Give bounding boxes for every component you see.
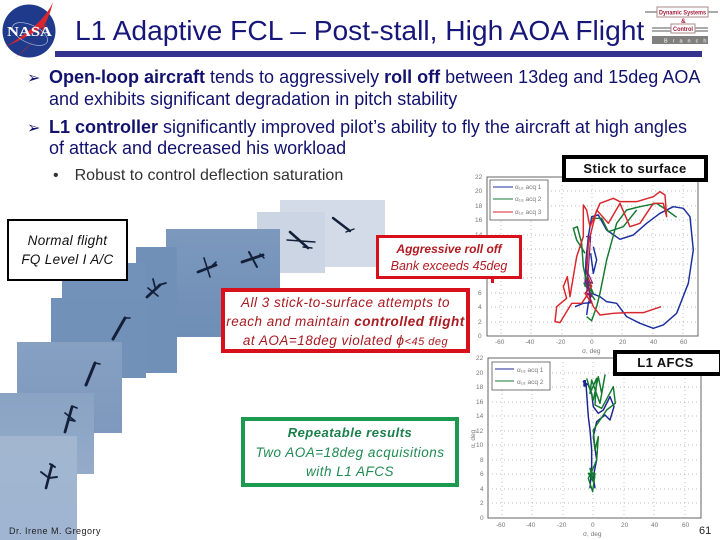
footer: author: Dr. Irene M. Gregory [9,526,101,536]
axis labels: 40 [651,522,659,529]
axis labels: 14 [475,232,483,239]
legend: α₁₈ acq 3 [515,209,542,216]
axis labels [470,355,690,538]
axis labels: 60 [682,522,690,529]
axis labels [475,174,688,355]
title rule [55,51,702,57]
callout: stick to surface [562,155,708,182]
axis labels: 20 [476,370,484,377]
bullet 2: of attack and decreased his workload [49,138,346,158]
callout: L1 AFCS: L1 AFCS [637,355,694,370]
callout tick [491,279,494,283]
Dynamic Systems & Control Branch logo: Branch [664,38,711,44]
axis labels: 12 [476,428,484,435]
bullet 1 [27,67,700,109]
axis labels: -40 [526,522,536,529]
legend: α₁₈ acq 2 [515,196,542,203]
axis labels: 18 [476,384,484,391]
bullet 1: and exhibits significant degradation in pitch stability [49,89,457,109]
axis labels: 10 [476,442,484,449]
axis labels: 2 [480,500,484,507]
axis labels: -20 [557,522,567,529]
Dynamic Systems & Control Branch logo: Dynamic Systems [659,10,706,16]
axis labels: 20 [621,522,629,529]
axis labels: 6 [480,471,484,478]
axis labels: 18 [475,203,483,210]
callout: all 3 attempts [221,288,470,353]
axis labels: 20 [475,188,483,195]
axis labels: 0 [478,333,482,340]
axis labels: σ, deg [582,348,601,355]
axis labels: -60 [495,339,505,346]
callout: all 3 attempts: All 3 stick-to-surface attempts to [241,295,450,310]
callout: aggressive roll off: Bank exceeds 45deg [391,259,507,273]
callout: all 3 attempts: at AOA=18deg violated ϕ<45 deg [243,332,448,348]
callout: repeatable results: Two AOA=18deg acquisitions [256,444,444,460]
axis labels: 0 [590,339,594,346]
axis labels: 6 [478,290,482,297]
axis labels: 16 [476,399,484,406]
legend [492,362,550,390]
callout: normal flight: Normal flight [28,233,107,248]
NASA logo: NASA [7,25,53,40]
axis labels: 20 [619,339,627,346]
callout: repeatable results: with L1 AFCS [306,464,394,479]
axis labels: -40 [525,339,535,346]
bullet 2: L1 controller significantly improved pilot’s ability to fly the aircraft at high angles [49,117,687,137]
axis labels: 40 [650,339,658,346]
page number: 61 [699,525,711,537]
bullet 2: ➢ [27,118,40,137]
callout: aggressive roll off [376,235,522,279]
title: L1 Adaptive FCL – Post-stall, High AOA Flight [75,14,644,46]
axis labels: 22 [476,355,484,362]
axis labels: 4 [478,304,482,311]
axis labels: 10 [475,261,483,268]
axis labels: 60 [680,339,688,346]
callout: stick to surface: Stick to surface [583,161,687,176]
legend: α₁₈ acq 2 [517,379,544,386]
Dynamic Systems & Control Branch logo: & [681,18,686,25]
callout: repeatable results: Repeatable results [288,425,412,440]
Dynamic Systems & Control Branch logo [645,6,718,44]
axis labels: 16 [475,217,483,224]
legend [490,180,548,220]
NASA logo [2,2,56,58]
axis labels: α, deg [470,429,477,448]
callout: normal flight [7,219,128,281]
legend: α₁₈ acq 1 [515,184,542,191]
callout: all 3 attempts: reach and maintain controlled flight [226,314,465,329]
sub-bullet: • Robust to control deflection saturation [53,167,343,184]
axis labels: σ, deg [583,531,602,538]
axis labels: 0 [480,515,484,522]
Dynamic Systems & Control Branch logo: Control [673,26,693,33]
bullet 1: ➢ [27,68,40,87]
axis labels: 22 [475,174,483,181]
axis labels: 0 [591,522,595,529]
axis labels: 4 [480,486,484,493]
axis labels: 14 [476,413,484,420]
callout: L1 AFCS [613,350,720,376]
bullet 1: Open-loop aircraft tends to aggressively roll off between 13deg and 15deg AOA [49,67,700,87]
bullet 2 [27,117,687,158]
callout: aggressive roll off: Aggressive roll off [396,242,502,256]
axis labels: 2 [478,319,482,326]
axis labels: -60 [496,522,506,529]
legend: α₁₈ acq 1 [517,367,544,374]
axis labels: -20 [556,339,566,346]
callout: repeatable results [241,417,459,487]
axis labels: 8 [480,457,484,464]
callout: normal flight: FQ Level I A/C [21,252,114,267]
